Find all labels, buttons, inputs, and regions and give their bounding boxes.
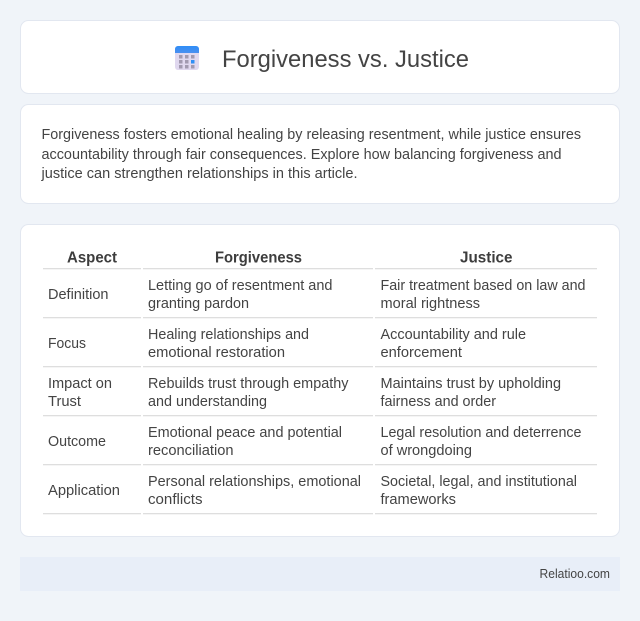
table row: focus: Accountability and rule [380, 327, 526, 343]
intro text [41, 127, 581, 182]
intro text: justice can strengthen relationships in this article. [41, 166, 358, 182]
table row: impact on trust: Rebuilds trust through empathy [148, 376, 349, 392]
panel: comparison table [20, 224, 620, 536]
table row: focus [48, 327, 526, 361]
table row: focus: Focus [48, 336, 86, 352]
table row: outcome: reconciliation [148, 443, 234, 459]
table row: outcome: of wrongdoing [380, 443, 472, 459]
table row: outcome: Legal resolution and deterrence [380, 425, 582, 441]
table row: impact on trust [48, 376, 561, 410]
table row: definition: granting pardon [148, 296, 249, 312]
table row: application: Personal relationships, emotional [148, 474, 361, 490]
intro text: Forgiveness fosters emotional healing by releasing resentment, while justice ensures [42, 127, 581, 143]
table row: focus: emotional restoration [148, 345, 285, 361]
table row: application: Application [48, 483, 120, 499]
table header row [67, 250, 513, 266]
panel: title card [20, 20, 620, 94]
table row: application: frameworks [380, 492, 456, 508]
footer bar [20, 557, 620, 591]
table header row: Forgiveness [215, 250, 302, 266]
table row: impact on trust: Maintains trust by upholding [380, 376, 561, 392]
table header row: Justice [460, 250, 513, 266]
table row: application: conflicts [148, 492, 202, 508]
table row: outcome: Outcome [48, 434, 106, 450]
intro text: accountability through fair consequences. Explore how balancing forgiveness and [42, 147, 562, 163]
table row: definition: moral rightness [380, 296, 480, 312]
table row: outcome: Emotional peace and potential [148, 425, 342, 441]
table header row: Aspect [67, 250, 118, 266]
table row: definition: Definition [48, 287, 108, 303]
table row: impact on trust: and understanding [148, 394, 267, 410]
table row: outcome [48, 425, 582, 459]
table row: application [48, 474, 577, 508]
table row: impact on trust: Trust [48, 394, 81, 410]
panel: introduction [20, 104, 620, 204]
table row: definition: Letting go of resentment and [148, 278, 332, 294]
table row: focus: Healing relationships and [148, 327, 309, 343]
table row: impact on trust: Impact on [48, 376, 112, 392]
table row: focus: enforcement [380, 345, 462, 361]
footer credit: Relatioo.com [540, 567, 610, 581]
title: Forgiveness vs. Justice [222, 46, 469, 73]
table row: application: Societal, legal, and institutional [380, 474, 577, 490]
icon: calendar [175, 46, 199, 70]
table row: impact on trust: fairness and order [380, 394, 496, 410]
table row: definition: Fair treatment based on law and [380, 278, 586, 294]
table row: definition [48, 278, 586, 312]
